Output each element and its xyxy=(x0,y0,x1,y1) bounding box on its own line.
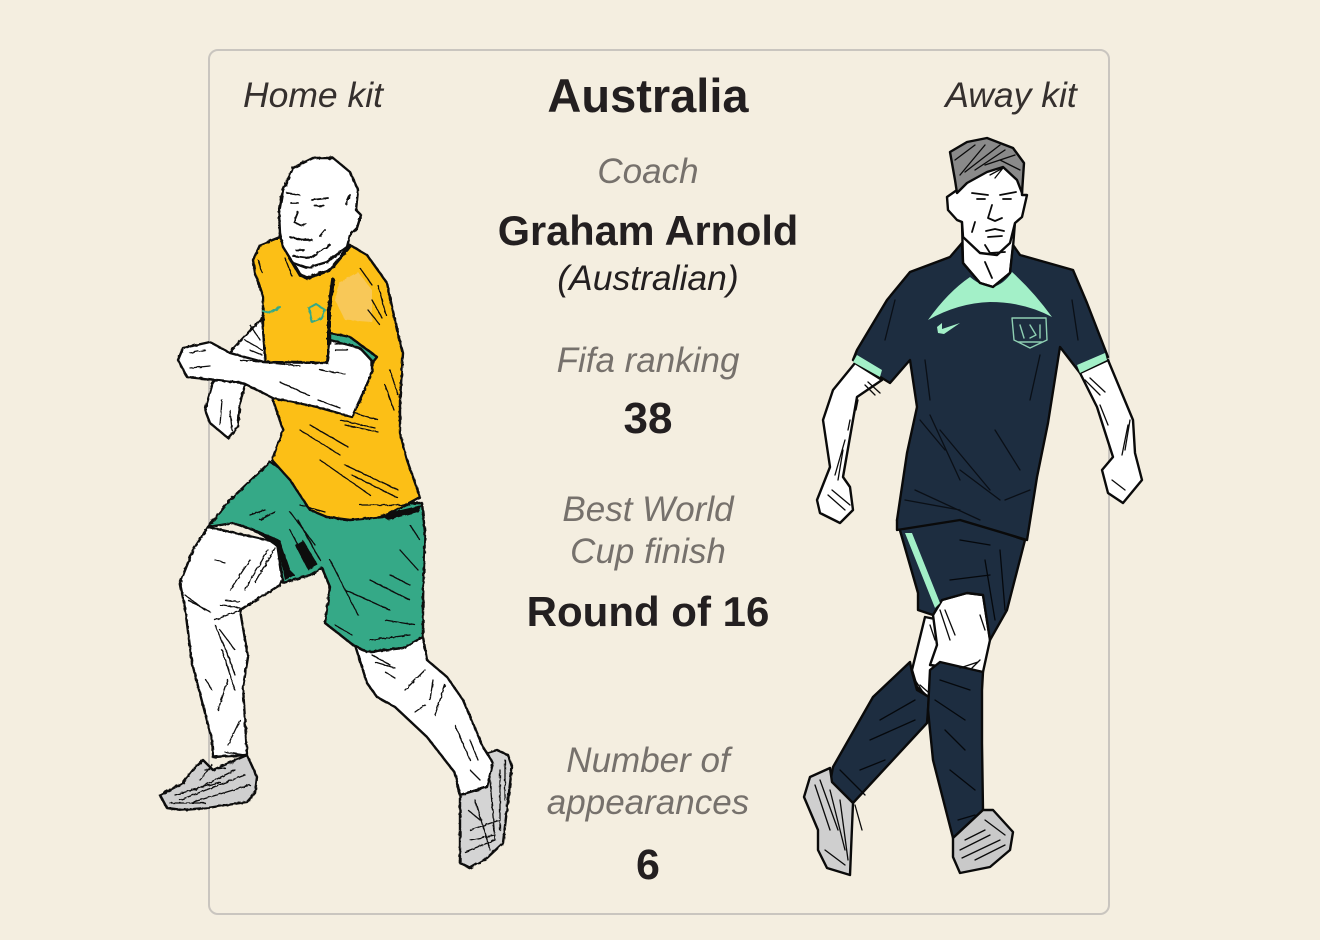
front arm xyxy=(178,340,372,417)
front thigh and knee xyxy=(930,593,990,672)
neck edge xyxy=(963,263,1010,287)
crest xyxy=(1012,318,1047,348)
hair strands xyxy=(955,145,1020,178)
shirt xyxy=(253,237,420,520)
face xyxy=(972,192,1016,278)
chest folds xyxy=(885,300,1078,520)
sleeve cuffs xyxy=(853,353,1107,377)
back leg knee xyxy=(912,617,945,697)
front boot xyxy=(953,810,1013,873)
arm hatching xyxy=(828,378,1130,510)
shorts xyxy=(208,462,425,652)
label: best world cup finish: Best World xyxy=(562,490,734,529)
neck xyxy=(962,222,1015,287)
head xyxy=(279,158,361,268)
back leg sock xyxy=(830,662,929,803)
boot hatching xyxy=(815,780,1005,865)
shirt xyxy=(853,243,1108,540)
label: number of appearances xyxy=(547,741,749,822)
sleeve cuff xyxy=(330,333,377,362)
head xyxy=(947,150,1027,255)
shorts and sock folds xyxy=(840,540,1005,820)
boot hatching xyxy=(170,760,505,852)
back boot xyxy=(804,768,853,875)
nike swoosh xyxy=(937,323,960,334)
left arm and hand xyxy=(817,363,882,523)
title: Australia xyxy=(547,69,749,122)
rear boot xyxy=(460,750,512,868)
front leg sock xyxy=(928,662,983,838)
knee hatching xyxy=(915,610,985,695)
shorts xyxy=(897,518,1025,640)
label: fifa ranking: Fifa ranking xyxy=(557,341,739,380)
label: number of appearances: Number of xyxy=(566,741,730,780)
shorts dark fold xyxy=(250,505,422,580)
nike swoosh and crest on home shirt xyxy=(263,304,325,322)
shirt mint yoke xyxy=(928,272,1052,320)
front boot xyxy=(160,755,257,810)
hair xyxy=(950,138,1024,193)
value: appearances: 6 xyxy=(636,841,660,889)
panel: card frame xyxy=(208,49,1110,915)
label: coach: Coach xyxy=(597,152,699,191)
rear arm and hand xyxy=(205,318,266,438)
right arm and hand xyxy=(1080,360,1142,503)
shorts hatching xyxy=(250,510,420,640)
leg hatching xyxy=(185,548,480,780)
face xyxy=(287,193,350,258)
front leg xyxy=(180,527,290,757)
label: best world cup finish: Cup finish xyxy=(570,532,726,571)
value: coach nationality: (Australian) xyxy=(557,258,739,298)
shorts mint stripe xyxy=(905,533,940,608)
heading: away kit: Away kit xyxy=(945,75,1077,115)
value: coach name: Graham Arnold xyxy=(498,207,798,254)
arm hatching xyxy=(190,325,350,430)
shirt seam xyxy=(329,280,333,362)
value: best finish: Round of 16 xyxy=(527,588,769,635)
shirt wrinkle hatching xyxy=(258,258,410,512)
value: fifa ranking: 38 xyxy=(624,394,672,443)
neck xyxy=(290,240,350,278)
rear leg xyxy=(355,637,493,795)
label: best world cup finish xyxy=(562,490,734,571)
heading: home kit: Home kit xyxy=(243,75,383,115)
shoulder highlight xyxy=(335,272,372,322)
label: number of appearances: appearances xyxy=(547,783,749,822)
